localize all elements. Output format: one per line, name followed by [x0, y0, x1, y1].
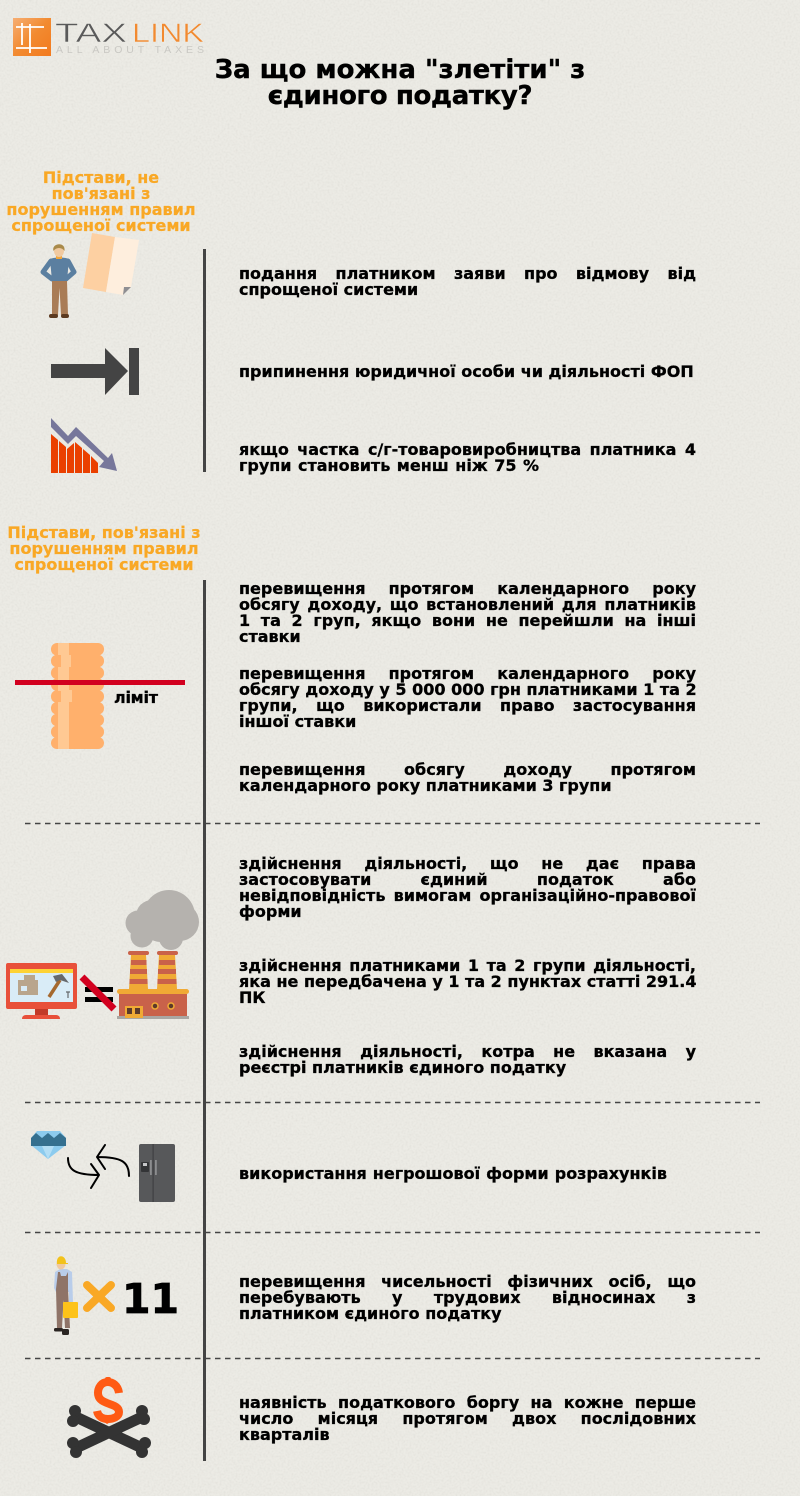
- text: activity not provided for groups 1 and 2: здійснення платниками 1 та 2 групи діяльності,: [239, 956, 696, 975]
- logo: TAX: [55, 18, 127, 48]
- text: income excess 5 000 000: перевищення протягом календарного року: [239, 664, 696, 683]
- icon: coin stack with limit line: [15, 643, 185, 749]
- text: number of employees: перебувають у трудових відносинах з: [239, 1288, 696, 1307]
- text: tax debt: наявність податкового боргу на кожне перше: [239, 1393, 696, 1412]
- text: tax debt: [239, 1393, 696, 1444]
- icon: man with document: [43, 233, 139, 318]
- icon: worker: [54, 1256, 78, 1335]
- icon: fridge: [139, 1144, 175, 1202]
- text: termination of activity: припинення юридичної особи чи діяльності ФОП: [239, 362, 694, 381]
- text: prohibited activity: здійснення діяльності, що не дає права: [239, 854, 696, 873]
- text: income excess groups 1 and 2: перевищення протягом календарного року: [239, 579, 696, 598]
- text: activity not provided for groups 1 and 2: яка не передбачена у 1 та 2 пунктах статті 291.4: [239, 972, 697, 991]
- icon: factory with smoke: [117, 890, 199, 1019]
- heading: grounds related to violations: Підстави, пов'язані з: [7, 523, 201, 542]
- text: activity not provided for groups 1 and 2: ПК: [239, 988, 265, 1007]
- text: income excess group 3: перевищення обсягу доходу протягом: [239, 760, 696, 779]
- icon: stop arrow: [51, 348, 139, 395]
- title: За що можна "злетіти" з: [215, 55, 585, 85]
- heading: grounds not related to violations: пов'язані з: [52, 184, 150, 203]
- text: number of employees: перевищення чисельності фізичних осіб, що: [239, 1272, 696, 1291]
- text: activity not in register: [239, 1042, 696, 1077]
- text: income excess group 3: [239, 760, 696, 795]
- text: prohibited activity: невідповідність вимогам організаційно-правової: [239, 886, 696, 905]
- text: number of employees: платником єдиного податку: [239, 1304, 502, 1323]
- text: activity not in register: здійснення діяльності, котра не вказана у: [239, 1042, 696, 1061]
- text: income excess 5 000 000: іншої ставки: [239, 712, 356, 731]
- text: application of refusal: подання платником заяви про відмову від: [239, 264, 696, 283]
- text: income excess 5 000 000: обсягу доходу у 5 000 000 грн платниками 1 та 2: [239, 680, 697, 699]
- text: income excess groups 1 and 2: 1 та 2 груп, якщо вони не перейшли на інші: [239, 611, 696, 630]
- icon: falling chart: [51, 418, 117, 473]
- heading: grounds not related to violations: спрощеної системи: [11, 216, 191, 235]
- vertical divider: first section: [203, 249, 206, 472]
- text: income excess group 3: календарного року платниками 3 групи: [239, 776, 612, 795]
- text: activity not in register: реєстрі платників єдиного податку: [239, 1058, 566, 1077]
- text: application of refusal: [239, 264, 696, 299]
- text: application of refusal: спрощеної системи: [239, 280, 418, 299]
- logo: LINK: [132, 18, 204, 48]
- text: income excess groups 1 and 2: [239, 579, 696, 646]
- number eleven: 11: [122, 1275, 179, 1323]
- text: income excess groups 1 and 2: ставки: [239, 627, 301, 646]
- logo: ALL ABOUT TAXES: [56, 44, 204, 56]
- heading: grounds not related to violations: [6, 168, 196, 235]
- text: prohibited activity: форми: [239, 902, 302, 921]
- vertical divider: second section: [203, 580, 206, 1461]
- heading: grounds not related to violations: порушенням правил: [6, 200, 196, 219]
- logo: [13, 18, 204, 56]
- icon: multiply sign: [87, 1285, 111, 1308]
- text: prohibited activity: застосовувати єдиний податок або: [239, 870, 696, 889]
- text: tax debt: число місяця протягом двох послідовних: [239, 1409, 696, 1428]
- heading: grounds related to violations: [7, 523, 201, 574]
- text: non-monetary settlement: використання негрошової форми розрахунків: [239, 1164, 667, 1183]
- icon: not equal sign: [82, 977, 114, 1009]
- heading: grounds related to violations: порушенням правил: [9, 539, 199, 558]
- text: prohibited activity: [239, 854, 696, 921]
- text: income excess 5 000 000: групи, що використали право застосування: [239, 696, 696, 715]
- title: єдиного податку?: [268, 81, 532, 111]
- title: [215, 55, 585, 111]
- icon: monitor with tools: [6, 963, 77, 1019]
- text: agricultural share: групи становить менш ніж 75 %: [239, 456, 539, 475]
- text: number of employees: [239, 1272, 696, 1323]
- icon: diamond: [31, 1131, 66, 1159]
- heading: grounds related to violations: спрощеної системи: [14, 555, 194, 574]
- icon: coin stack with limit line: ліміт: [114, 688, 159, 707]
- icon: exchange arrows: [68, 1145, 129, 1188]
- text: tax debt: кварталів: [239, 1425, 330, 1444]
- text: activity not provided for groups 1 and 2: [239, 956, 697, 1007]
- text: agricultural share: якщо частка с/г-товаровиробництва платника 4: [239, 440, 696, 459]
- icon: crossbones with dollar: [67, 1377, 151, 1458]
- heading: grounds not related to violations: Підстави, не: [43, 168, 159, 187]
- text: agricultural share: [239, 440, 696, 475]
- text: income excess groups 1 and 2: обсягу доходу, що встановлений для платників: [239, 595, 696, 614]
- text: income excess 5 000 000: [239, 664, 697, 731]
